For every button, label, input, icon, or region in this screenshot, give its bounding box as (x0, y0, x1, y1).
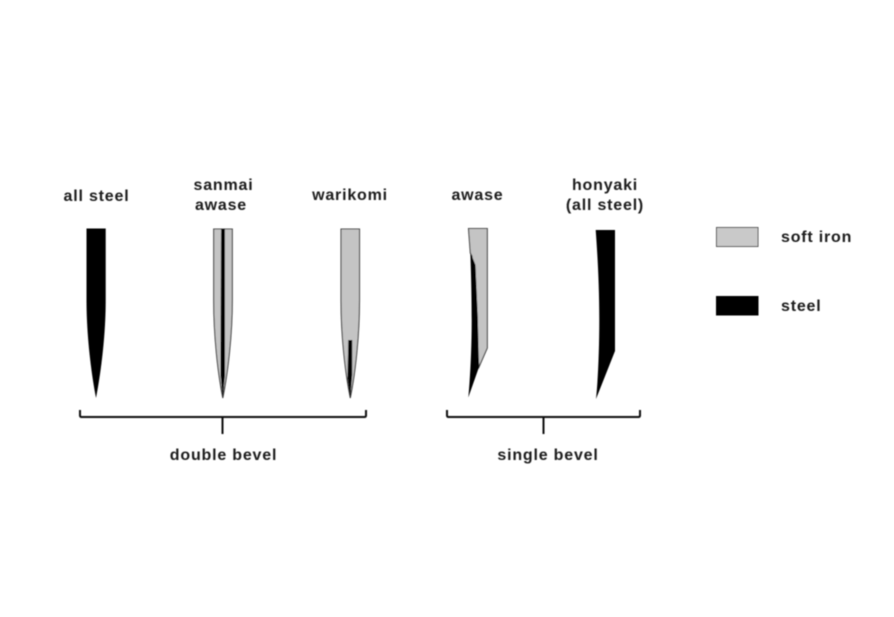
label: honyaki (all steel): (all steel) (566, 197, 644, 214)
honyaki blade group (566, 177, 644, 399)
label: single bevel: single bevel (497, 447, 599, 464)
label: sanmai awase: sanmai (194, 177, 253, 194)
sanmai awase blade group (194, 177, 253, 398)
blade: soft iron body (468, 228, 487, 367)
legend swatch: steel (716, 296, 758, 316)
label: all steel: all steel (64, 188, 129, 205)
blade: honyaki (596, 230, 615, 399)
blade: steel core (220, 229, 225, 398)
blade: all steel (86, 228, 106, 398)
label: sanmai awase: awase (195, 197, 247, 214)
legend swatch: soft iron (716, 228, 758, 246)
legend label: steel: steel (781, 298, 821, 315)
legend label: soft iron: soft iron (781, 229, 852, 246)
bracket: single bevel (447, 410, 640, 434)
blade: soft iron body (341, 229, 360, 398)
blade: steel insert (348, 340, 352, 398)
blade: steel edge (468, 252, 479, 398)
label: warikomi: warikomi (311, 187, 388, 204)
label: double bevel: double bevel (170, 447, 277, 464)
bracket: double bevel (80, 410, 366, 434)
legend (716, 228, 852, 316)
blade: soft iron body (214, 229, 232, 398)
awase single bevel blade group (451, 187, 504, 398)
bracket group: single bevel (447, 410, 640, 464)
label: honyaki (all steel): honyaki (572, 177, 638, 194)
label: awase: awase (451, 187, 504, 204)
warikomi blade group (311, 187, 388, 398)
bracket group: double bevel (80, 410, 366, 464)
all steel blade group (64, 188, 129, 398)
